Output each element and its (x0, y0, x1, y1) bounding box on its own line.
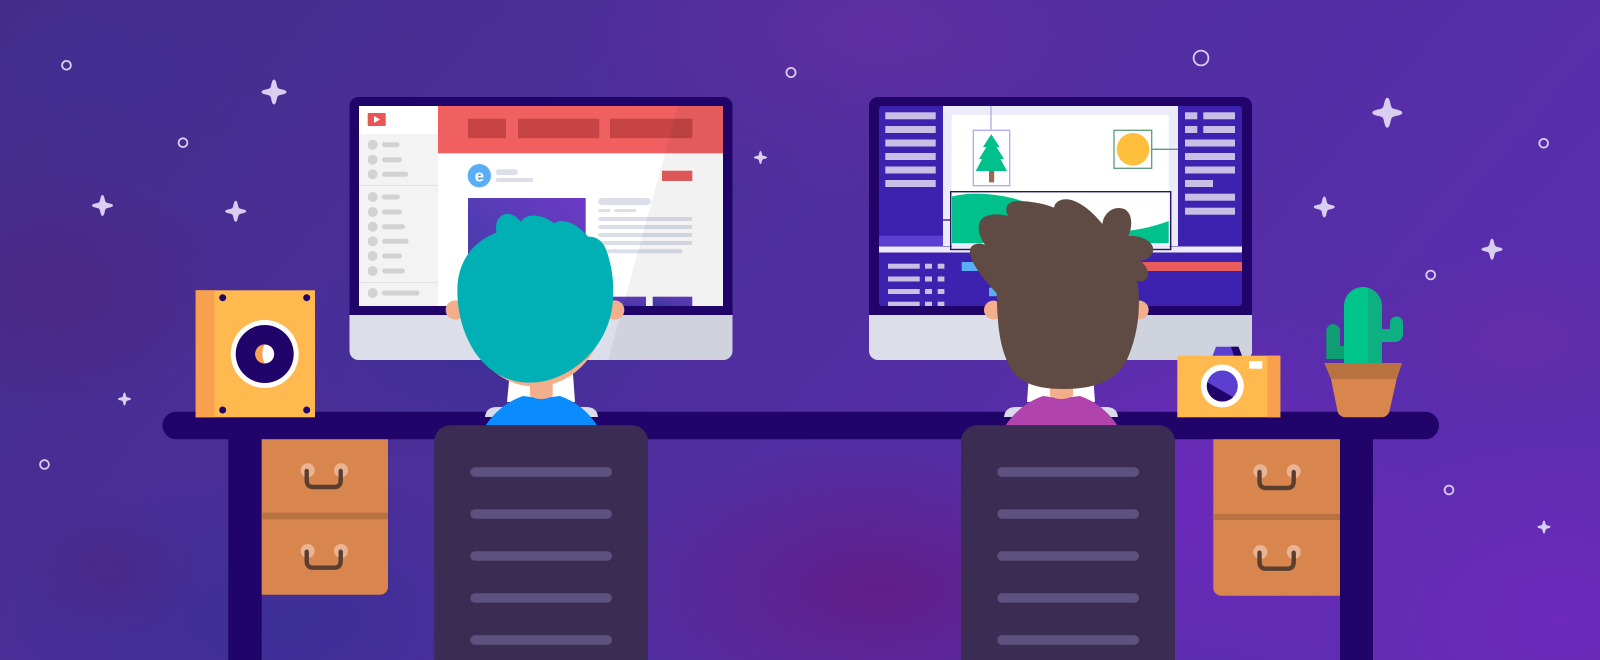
editor screen (879, 106, 1242, 306)
decorative stars (92, 80, 1550, 534)
person: teal hair, blue shirt (446, 214, 624, 425)
canvas (879, 106, 1242, 252)
channel avatar (468, 164, 491, 187)
top handle (1253, 464, 1301, 488)
related video thumbnails (606, 297, 692, 306)
neck (530, 375, 553, 399)
monitor: design editor (869, 97, 1252, 360)
subscribe button (662, 171, 692, 181)
top handle (301, 463, 348, 487)
monitor stands (507, 360, 1095, 402)
camera (1177, 347, 1280, 417)
hair (970, 199, 1153, 389)
monitor chin (869, 315, 1252, 360)
screen (359, 106, 723, 306)
monitor frame (869, 97, 1252, 360)
shirt (1006, 396, 1117, 425)
play logo (368, 113, 386, 126)
hair (457, 214, 613, 383)
channel avatar: e (475, 166, 484, 186)
monitor frame (350, 97, 732, 360)
bottom handle (301, 544, 348, 568)
video thumbnail (468, 198, 586, 306)
chair: right (961, 425, 1175, 660)
red header bar (438, 106, 723, 153)
sun layer (1114, 130, 1178, 168)
sidebar (359, 134, 438, 306)
monitor foot (1004, 407, 1118, 417)
channel name lines (496, 169, 533, 182)
ears (446, 300, 624, 320)
potted cactus (1324, 287, 1403, 417)
bottom handle (1253, 545, 1301, 569)
face (463, 220, 607, 387)
right drawers (1213, 439, 1340, 596)
person: brown hair, purple shirt (970, 199, 1153, 425)
shirt (486, 396, 597, 425)
left tool panel (879, 112, 943, 246)
glass reflection (608, 106, 732, 360)
speaker (196, 290, 315, 417)
chair: left (434, 425, 648, 660)
decorative ring dots (40, 51, 1548, 494)
timeline (888, 262, 1242, 306)
tree layer (973, 106, 1010, 186)
hill layer (943, 192, 1171, 250)
left drawers (262, 439, 388, 595)
right properties panel (1185, 112, 1235, 215)
monitor chin (350, 315, 732, 360)
ears (984, 301, 1149, 319)
neck (1050, 375, 1073, 399)
description lines (598, 198, 692, 253)
desk with legs (162, 412, 1439, 660)
monitor foot (485, 407, 598, 417)
monitor: video channel page (350, 97, 732, 360)
